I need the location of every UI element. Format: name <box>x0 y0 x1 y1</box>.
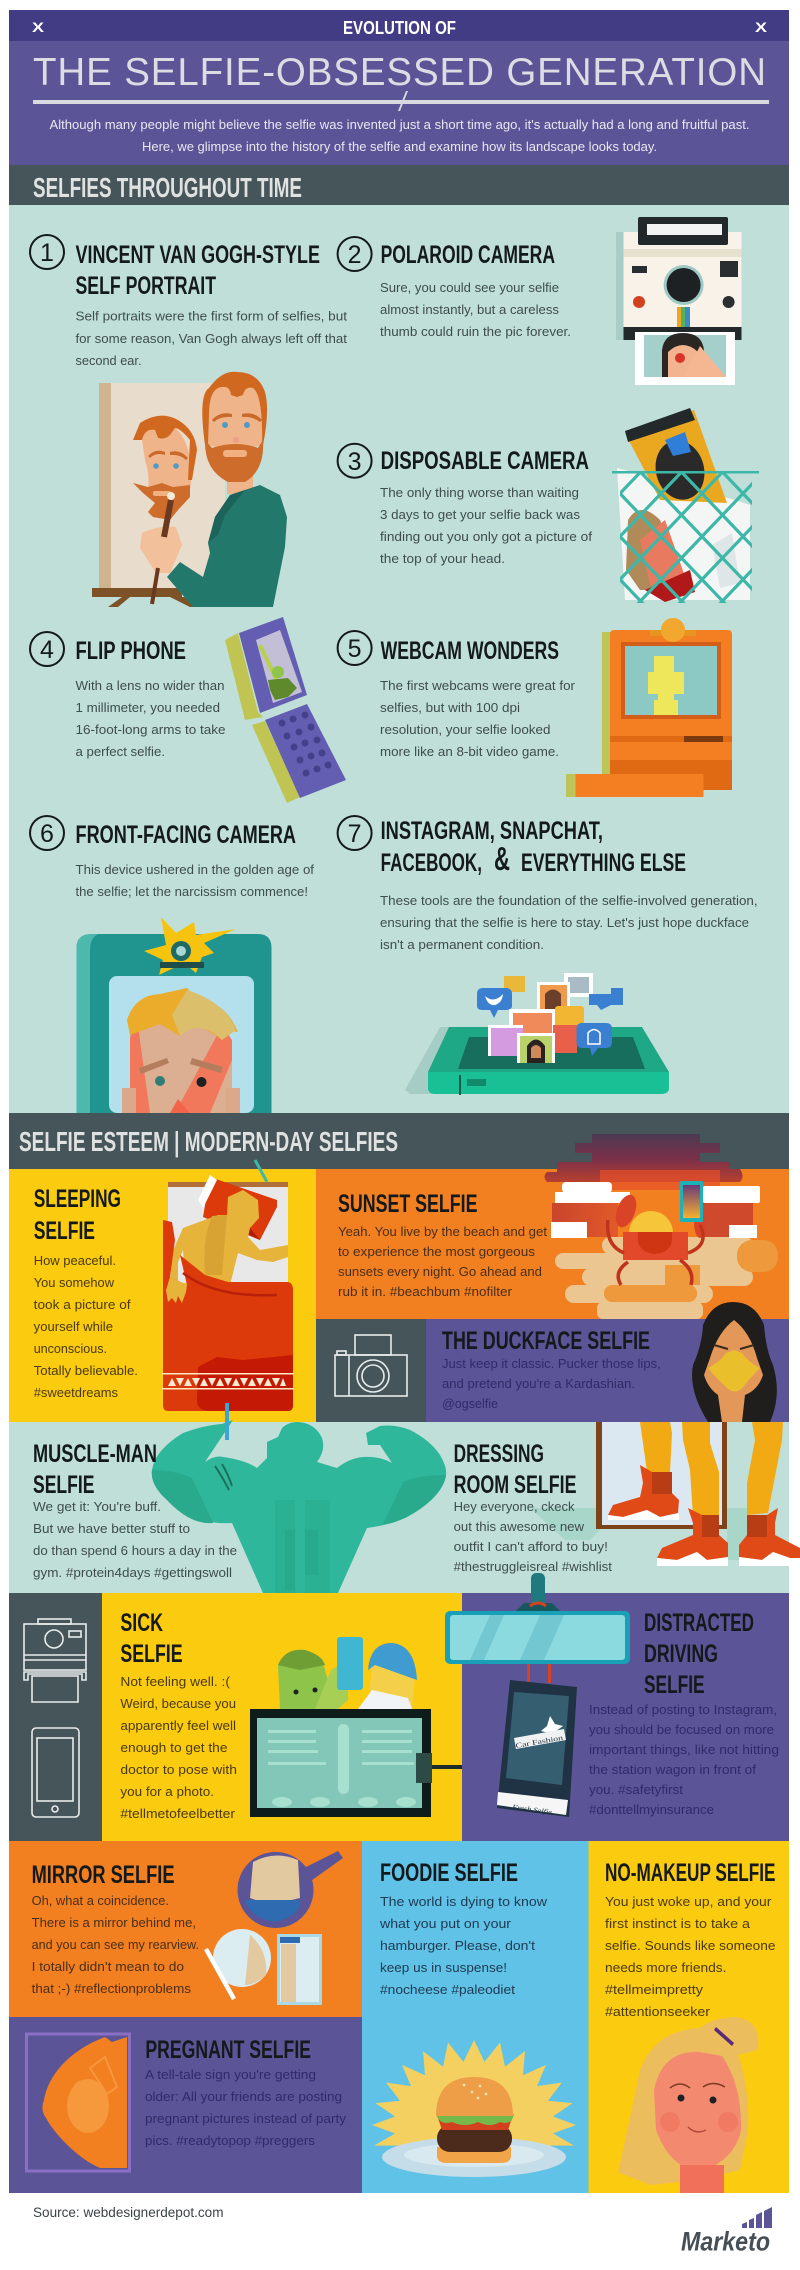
panel: device icons <box>9 1593 102 1841</box>
body text: Sure, you could see your selfie <box>380 280 559 295</box>
heading <box>76 241 320 300</box>
body text: #donttellmyinsurance <box>589 1802 714 1817</box>
body text: and pretend you're a Kardashian. <box>442 1376 635 1391</box>
body text <box>380 280 571 339</box>
body text <box>380 893 758 952</box>
body text: You just woke up, and your <box>605 1894 772 1909</box>
body text: #tellmetofeelbetter <box>120 1806 236 1821</box>
source note: Source: webdesignerdepot.com <box>33 2205 224 2220</box>
close mark left: X <box>32 19 45 35</box>
body text: isn't a permanent condition. <box>380 937 544 952</box>
heading: WEBCAM WONDERS <box>381 637 559 665</box>
panel: timeline background <box>9 205 789 1113</box>
body text: selfies, but with 100 dpi <box>380 700 520 715</box>
panel: sunset selfie <box>316 1134 789 1319</box>
intro text: Although many people might believe the selfie was invented just a short time ago, it's actually had a long and fruitful past. <box>50 117 750 132</box>
body text: Weird, because you <box>120 1696 236 1711</box>
body text <box>32 1893 199 1996</box>
body text: 1 millimeter, you needed <box>76 700 220 715</box>
icon: camera outline <box>335 1335 407 1396</box>
body text: keep us in suspense! <box>380 1960 507 1975</box>
timeline item 3: disposable camera <box>338 408 759 603</box>
body text: almost instantly, but a careless <box>380 302 559 317</box>
heading <box>34 1185 121 1245</box>
mock phone captions <box>511 1734 564 1817</box>
illustration: phone with selfie <box>76 917 272 1113</box>
logo: Marketo <box>681 2207 772 2256</box>
number badge 5 <box>338 631 372 665</box>
body text: With a lens no wider than <box>76 678 224 693</box>
body text <box>120 1674 237 1821</box>
panel: distracted driving selfie <box>445 1573 789 1841</box>
illustration: flip phone <box>225 617 346 803</box>
body text <box>442 1356 661 1411</box>
illustration: rearview mirror and phone <box>445 1573 630 1817</box>
body text: hamburger. Please, don't <box>380 1938 535 1953</box>
panel: no-makeup selfie <box>588 1841 789 2193</box>
panel: duckface selfie <box>316 1302 789 1422</box>
title rule <box>33 91 769 111</box>
body text: pics. #readytopop #preggers <box>145 2133 316 2148</box>
body text: Instead of posting to Instagram, <box>589 1702 777 1717</box>
number badge 6 <box>30 816 64 850</box>
illustration: ultrasound <box>26 2034 130 2171</box>
body text: muscle-man: gym. #protein4days #gettingswoll <box>33 1565 232 1580</box>
body text: the selfie; let the narcissism commence! <box>76 884 308 899</box>
body text <box>605 1894 776 2019</box>
body text: older: All your friends are posting <box>145 2089 342 2104</box>
heading: FOODIE SELFIE <box>380 1859 518 1887</box>
body text: The first webcams were great for <box>380 678 576 693</box>
body text: what you put on your <box>379 1916 512 1931</box>
body text: 16-foot-long arms to take <box>76 722 226 737</box>
number badge 2: 2 <box>348 241 362 269</box>
body text <box>76 862 314 899</box>
body text: dressing room: #thestruggleisreal #wishlist <box>454 1559 612 1574</box>
heading: POLAROID CAMERA <box>381 241 555 269</box>
body text: and you can see my rearview. <box>32 1937 199 1952</box>
heading: SELFIE <box>120 1640 183 1668</box>
heading: dressing room: ROOM SELFIE <box>454 1471 576 1499</box>
timeline item 5: webcam <box>338 618 732 797</box>
body text: A tell-tale sign you're getting <box>145 2067 316 2082</box>
body text <box>76 308 347 368</box>
number badge 5: 5 <box>348 635 362 663</box>
body text: I totally didn't mean to do <box>32 1959 184 1974</box>
section band: selfies throughout time <box>9 165 789 205</box>
heading: SUNSET SELFIE <box>338 1190 478 1218</box>
heading: DISPOSABLE CAMERA <box>381 447 589 475</box>
number badge 3: 3 <box>348 448 362 476</box>
heading: SICK <box>120 1609 163 1637</box>
title: THE SELFIE-OBSESSED GENERATION <box>33 51 766 94</box>
heading: muscle-man: SELFIE <box>33 1471 94 1499</box>
body text: How peaceful. <box>34 1253 116 1268</box>
panel: muscle-man and dressing room <box>9 1403 800 1593</box>
body text: Yeah. You live by the beach and get <box>338 1224 547 1239</box>
heading: FACEBOOK, <box>381 849 482 877</box>
body text: These tools are the foundation of the selfie-involved generation, <box>380 893 758 908</box>
body text <box>76 678 226 759</box>
body text: muscle-man: do than spend 6 hours a day in the <box>33 1543 237 1558</box>
heading: FLIP PHONE <box>76 637 186 665</box>
body text: needs more friends. <box>605 1960 726 1975</box>
number badge 7: 7 <box>348 820 362 848</box>
heading: muscle-man: MUSCLE-MAN <box>33 1440 157 1468</box>
eyebrow heading: EVOLUTION OF <box>343 17 456 38</box>
heading: dressing room <box>454 1440 576 1499</box>
number badge 7 <box>338 816 372 850</box>
body text: #tellmeimpretty <box>605 1982 704 1997</box>
body text <box>379 1894 548 1997</box>
body text: #sweetdreams <box>34 1385 118 1400</box>
body text <box>338 1224 547 1299</box>
timeline item 4: flip phone <box>30 617 346 803</box>
body text: you. #safetyfirst <box>589 1782 683 1797</box>
header panel <box>9 10 789 165</box>
body text: You somehow <box>34 1275 115 1290</box>
body text: dressing room: out this awesome new <box>454 1519 585 1534</box>
intro text <box>50 117 750 154</box>
heading: muscle-man <box>33 1440 157 1499</box>
panel: foodie selfie <box>362 1841 588 2193</box>
body text: finding out you only got a picture of <box>380 529 592 544</box>
body text: dressing room: Hey everyone, ckeck <box>454 1499 575 1514</box>
body text: you should be focused on more <box>589 1722 774 1737</box>
illustration: tablet with social cards <box>405 973 669 1095</box>
heading: SELF PORTRAIT <box>76 272 216 300</box>
body text: second ear. <box>76 353 142 368</box>
body text: 3 days to get your selfie back was <box>380 507 581 522</box>
number badge 1: 1 <box>40 239 54 267</box>
illustration: patient, doctor and x-ray <box>250 1637 462 1817</box>
body text: Oh, what a coincidence. <box>32 1893 169 1908</box>
body text: Not feeling well. :( <box>120 1674 231 1689</box>
number badge 2 <box>338 237 372 271</box>
body text: apparently feel well <box>120 1718 236 1733</box>
heading: dressing room: DRESSING <box>454 1440 544 1468</box>
body text: dressing room: outfit I can't afford to buy! <box>454 1539 608 1554</box>
illustration: photos in wastebasket <box>612 408 759 603</box>
body text: sunsets every night. Go ahead and <box>338 1264 542 1279</box>
body text: rub it in. #beachbum #nofilter <box>338 1284 513 1299</box>
mock phone captions: Fresh Selfie <box>511 1803 552 1817</box>
body text: first instinct is to take a <box>605 1916 751 1931</box>
body text: muscle-man: But we have better stuff to <box>33 1521 190 1536</box>
section band: selfie esteem: SELFIE ESTEEM | MODERN-DAY SELFIES <box>19 1126 398 1157</box>
heading: FRONT-FACING CAMERA <box>76 821 296 849</box>
heading: & <box>494 840 510 877</box>
body text: #nocheese #paleodiet <box>380 1982 515 1997</box>
illustration: burger <box>372 2040 576 2177</box>
illustration: dressing room mirror and legs <box>530 1422 800 1566</box>
illustration: sunset and crab <box>544 1134 778 1319</box>
body text: Just keep it classic. Pucker those lips, <box>442 1356 661 1371</box>
body text <box>380 678 576 759</box>
body text: resolution, your selfie looked <box>380 722 550 737</box>
body text: you for a photo. <box>120 1784 214 1799</box>
timeline item 1: Van Gogh <box>30 235 347 607</box>
body text: This device ushered in the golden age of <box>76 862 314 877</box>
icon: phone outline <box>32 1728 79 1817</box>
body text: enough to get the <box>120 1740 228 1755</box>
heading: VINCENT VAN GOGH-STYLE <box>76 241 320 269</box>
illustration: duckface woman <box>692 1302 777 1422</box>
panel: mirror selfie <box>9 1841 362 2017</box>
body text: pregnant pictures instead of party <box>145 2111 347 2126</box>
body text: Self portraits were the first form of selfies, but <box>76 308 347 324</box>
body text: dressing room <box>454 1499 612 1574</box>
body text: important things, like not hitting <box>589 1742 779 1757</box>
illustration: person sleeping in bed <box>162 1160 294 1411</box>
body text: that ;-) #reflectionproblems <box>32 1981 192 1996</box>
body text: muscle-man: We get it: You're buff. <box>33 1499 161 1514</box>
intro text: Here, we glimpse into the history of the selfie and examine how its landscape looks today. <box>142 139 657 154</box>
body text: to experience the most gorgeous <box>338 1244 536 1259</box>
body text: unconscious. <box>34 1341 107 1356</box>
illustration: webcam computer <box>566 618 732 797</box>
heading <box>381 817 686 877</box>
body text: for some reason, Van Gogh always left off that <box>76 331 347 346</box>
close mark right: X <box>755 19 768 35</box>
heading: DRIVING <box>644 1640 718 1668</box>
body text: took a picture of <box>34 1297 131 1312</box>
body text: Totally believable. <box>34 1363 138 1378</box>
body text <box>380 485 592 566</box>
body text <box>589 1702 779 1817</box>
heading: MIRROR SELFIE <box>32 1861 174 1889</box>
section band: selfie esteem <box>9 1113 789 1169</box>
illustration: muscle man <box>152 1403 446 1593</box>
illustration: blonde woman <box>618 2017 759 2193</box>
timeline item 2: Polaroid camera <box>338 217 742 385</box>
heading: INSTAGRAM, SNAPCHAT, <box>381 817 603 845</box>
panel: pregnant selfie <box>9 2017 362 2193</box>
body text: selfie. Sounds like someone <box>605 1938 776 1953</box>
timeline item 7: social apps <box>338 816 758 1095</box>
body text: ensuring that the selfie is here to stay. Let's just hope duckface <box>380 915 749 930</box>
number badge 6: 6 <box>40 820 54 848</box>
illustration: polaroid camera <box>616 217 742 385</box>
number badge 3 <box>338 444 372 478</box>
body text: a perfect selfie. <box>76 744 165 759</box>
panel: sleeping selfie <box>9 1160 316 1422</box>
heading <box>120 1609 183 1668</box>
number badge 4 <box>30 632 64 666</box>
body text: There is a mirror behind me, <box>32 1915 196 1930</box>
logo: Marketo: Marketo <box>681 2226 770 2256</box>
body text: yourself while <box>34 1319 113 1334</box>
section band: selfies throughout time: SELFIES THROUGHOUT TIME <box>33 172 302 203</box>
body text: the station wagon in front of <box>589 1762 756 1777</box>
heading <box>644 1609 754 1699</box>
body text: #attentionseeker <box>605 2004 711 2019</box>
panel: sick selfie <box>102 1593 462 1841</box>
illustration: Van Gogh painting self portrait <box>92 372 287 607</box>
number badge 1 <box>30 235 64 269</box>
heading: SLEEPING <box>34 1185 121 1213</box>
body text: the top of your head. <box>380 551 505 566</box>
heading: THE DUCKFACE SELFIE <box>442 1327 650 1355</box>
body text: muscle-man <box>33 1499 237 1580</box>
illustration: mirrors <box>204 1851 343 2005</box>
body text <box>145 2067 347 2148</box>
timeline item 6: front-facing camera <box>30 816 314 1113</box>
body text <box>34 1253 138 1400</box>
heading: PREGNANT SELFIE <box>145 2036 311 2064</box>
heading: EVERYTHING ELSE <box>521 849 686 877</box>
body text: thumb could ruin the pic forever. <box>380 324 571 339</box>
heading: SELFIE <box>644 1671 705 1699</box>
heading: SELFIE <box>34 1217 95 1245</box>
body text: The only thing worse than waiting <box>380 485 579 500</box>
body text: doctor to pose with <box>120 1762 237 1777</box>
body text: more like an 8-bit video game. <box>380 744 559 759</box>
body text: @ogselfie <box>442 1396 498 1411</box>
number badge 4: 4 <box>40 636 54 664</box>
mock phone captions: Car Fashion <box>515 1734 564 1750</box>
icon: polaroid outline <box>24 1619 86 1702</box>
body text: The world is dying to know <box>380 1894 548 1909</box>
